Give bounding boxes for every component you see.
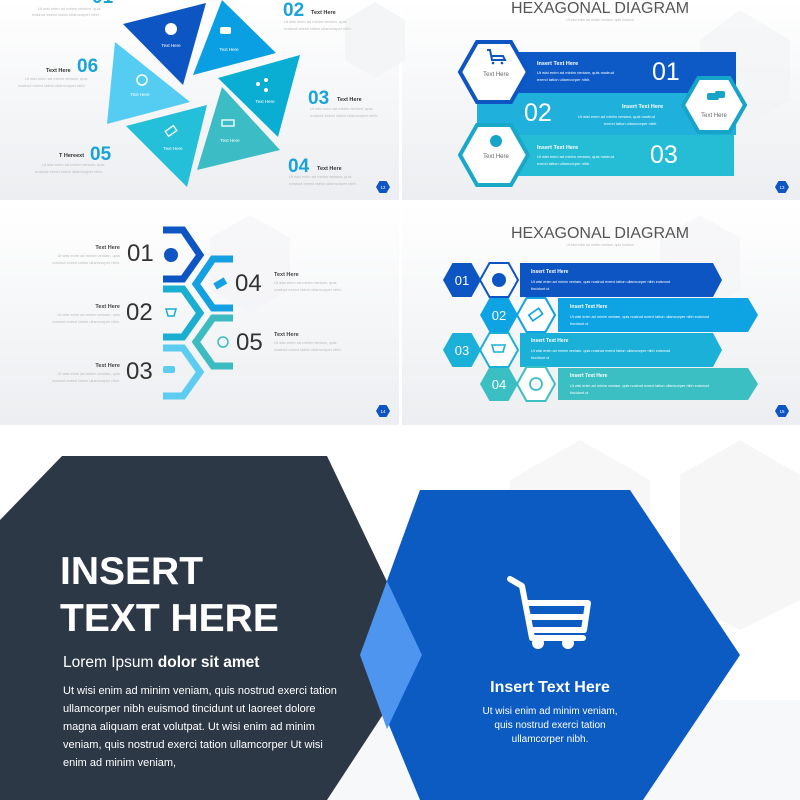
triangle 6 xyxy=(107,42,190,124)
triangle 2 xyxy=(193,0,276,75)
slide 12: triangle diagram xyxy=(18,0,390,193)
slide 13: hexagonal diagram bars: Ut wisi enim ad minim veniam, quis nostrud xyxy=(537,70,614,75)
slide 15: hexagon rows: Ut wisi enim ad minim veniam, quis nostrud exerci tation ullamcorper nibh euismod xyxy=(570,315,709,319)
slide 14: hex chevrons: Text Here xyxy=(274,272,299,278)
right heading and text: quis nostrud exerci tation xyxy=(494,720,606,731)
slide 13: hexagonal diagram bars: exerci tation ullamcorper nibh. xyxy=(604,121,657,126)
slide 12: triangle diagram: Text Here xyxy=(220,138,240,143)
triangle 5 xyxy=(126,105,207,187)
slide 14: hex chevrons: 05 xyxy=(236,329,263,356)
slide 12: triangle diagram: nostrud exerci tation ullamcorper nibh. xyxy=(284,26,352,31)
slide 13: hexagonal diagram bars: 03 xyxy=(650,141,678,169)
page badge 14: 14 xyxy=(380,409,386,414)
slide 12: triangle diagram: Text Here xyxy=(161,43,181,48)
title: HEXAGONAL DIAGRAM xyxy=(511,225,689,242)
slide 15: hexagon rows xyxy=(443,225,789,417)
slide 13: hexagonal diagram bars: 01 xyxy=(652,58,680,86)
labels: 06 xyxy=(77,56,98,77)
slide 14: hex chevrons: Text Here xyxy=(95,363,120,369)
slide 13: hexagonal diagram bars: Ut wisi enim ad minim veniam, quis nostrud xyxy=(537,154,614,159)
page badge 15: 15 xyxy=(779,409,785,414)
slide 14: hex chevrons: nostrud exerci tation ullamcorper nibh. xyxy=(52,319,120,324)
slide 14: hex chevrons: nostrud exerci tation ullamcorper nibh. xyxy=(52,260,120,265)
slide 12: triangle diagram: T Hereext xyxy=(59,153,84,159)
right heading and text xyxy=(482,679,618,745)
slide 14: hex chevrons: 04 xyxy=(235,270,262,297)
slide 13: hexagonal diagram bars: Insert Text Here xyxy=(622,104,663,110)
slide 12: triangle diagram: Text Here xyxy=(130,92,150,97)
slide 12: triangle diagram: nostrud exerci tation ullamcorper nibh. xyxy=(289,181,357,186)
slide 15: hexagon rows: tincidunt ut xyxy=(570,322,589,326)
slide 12: triangle diagram: Ut wisi enim ad minim veniam, quis xyxy=(25,76,87,81)
slide 15: hexagon rows: Insert Text Here xyxy=(531,338,569,344)
page badge 14 xyxy=(376,405,390,417)
slide 15: hexagon rows: tincidunt ut xyxy=(570,391,589,395)
slide 14: hex chevrons: nostrud exerci tation ullamcorper nibh. xyxy=(52,378,120,383)
subheading: Lorem Ipsum dolor sit amet xyxy=(63,654,259,671)
slide 15: hexagon rows: Ut wisi enim ad minim veniam, quis nostrud exerci tation ullamcorper nibh euismod xyxy=(570,384,709,388)
slide 13: hexagonal diagram bars xyxy=(460,0,789,193)
slide 15: hexagon rows: Insert Text Here xyxy=(531,269,569,275)
slide 12: triangle diagram: Text Here xyxy=(311,10,336,16)
slide 13: hexagonal diagram bars: 02 xyxy=(524,99,552,127)
slide 15: hexagon rows: Insert Text Here xyxy=(570,373,608,379)
paragraph: Ut wisi enim ad minim veniam, quis nostrud exerci tation xyxy=(63,685,337,697)
overlap diamond xyxy=(360,581,422,729)
slide 14: hex chevrons: Ut wisi enim ad minim veniam, quis xyxy=(274,280,336,285)
bottom slide xyxy=(0,456,800,800)
labels: 05 xyxy=(90,144,112,165)
blue hexagon xyxy=(360,490,740,800)
title: HEXAGONAL DIAGRAM xyxy=(511,0,689,17)
slide 14: hex chevrons: Ut wisi enim ad minim veniam, quis xyxy=(58,253,120,258)
slide 13: hexagonal diagram bars: Insert Text Here xyxy=(537,61,578,67)
slide 15: hexagon rows: Ut wisi enim ad minim veniam, quis nostrud xyxy=(566,243,634,247)
labels: 02 xyxy=(283,0,304,21)
page badge 13: 13 xyxy=(779,185,785,190)
slide 12: triangle diagram: Ut wisi enim ad minim veniam, quis xyxy=(289,174,351,179)
slide 14: hex chevrons xyxy=(52,230,390,417)
slide 15: hexagon rows: 04 xyxy=(492,377,506,392)
labels xyxy=(77,0,329,177)
labels: 04 xyxy=(288,156,310,177)
heading xyxy=(60,550,279,640)
heading: TEXT HERE xyxy=(60,597,279,640)
page badge 15 xyxy=(775,405,789,417)
slide 15: hexagon rows: 03 xyxy=(455,343,469,358)
slide 12: triangle diagram: Text Here xyxy=(163,146,183,151)
slide 14: hex chevrons: 02 xyxy=(126,299,153,326)
right heading and text: Ut wisi enim ad minim veniam, xyxy=(482,706,618,717)
heading: INSERT xyxy=(60,550,203,593)
slide backgrounds xyxy=(0,0,800,630)
slide 14: hex chevrons: nostrud exerci tation ullamcorper nibh. xyxy=(274,347,342,352)
slide 14: hex chevrons: Text Here xyxy=(274,332,299,338)
slide 12: triangle diagram: Text Here xyxy=(46,68,71,74)
triangle 4 xyxy=(197,87,280,170)
slide 14: hex chevrons: nostrud exerci tation ullamcorper nibh. xyxy=(274,287,342,292)
labels: 03 xyxy=(308,88,329,109)
right heading and text: Insert Text Here xyxy=(490,679,610,696)
slide 13: hexagonal diagram bars: Insert Text Here xyxy=(537,145,578,151)
page badge 13 xyxy=(775,181,789,193)
slide 14: hex chevrons: Ut wisi enim ad minim veniam, quis xyxy=(274,340,336,345)
slide 13: hexagonal diagram bars: Ut wisi enim ad minim veniam, quis nostrud xyxy=(566,18,634,22)
icon: cart xyxy=(510,579,588,638)
page badge 12: 12 xyxy=(380,185,386,190)
slide 15: hexagon rows: Ut wisi enim ad minim veniam, quis nostrud exerci tation ullamcorper nibh euismod xyxy=(531,349,670,353)
slide 15: hexagon rows: 01 xyxy=(455,273,469,288)
slide 12: triangle diagram: Ut wisi enim ad minim veniam, quis xyxy=(38,6,100,11)
slide 15: hexagon rows: tincidunt ut xyxy=(531,287,550,291)
slide 13: hexagonal diagram bars: Text Here xyxy=(483,72,509,78)
slide 12: triangle diagram: Text Here xyxy=(337,97,362,103)
slide 15: hexagon rows: tincidunt ut xyxy=(531,356,550,360)
slide 12: triangle diagram: Ut wisi enim ad minim veniam, quis xyxy=(310,106,372,111)
slide 12: triangle diagram: Ut wisi enim ad minim veniam, quis xyxy=(284,19,346,24)
page badge 12 xyxy=(376,181,390,193)
slide 14: hex chevrons: 03 xyxy=(126,358,153,385)
paragraph: ullamcorper nibh euismod tincidunt ut laoreet dolore xyxy=(63,703,316,715)
slide 15: hexagon rows: 02 xyxy=(492,308,506,323)
slide 13: hexagonal diagram bars: exerci tation ullamcorper nibh. xyxy=(537,77,590,82)
slide 14: hex chevrons: Ut wisi enim ad minim veniam, quis xyxy=(58,312,120,317)
triangle 1 xyxy=(123,3,206,85)
slide 14: hex chevrons: Text Here xyxy=(95,304,120,310)
number hexes xyxy=(443,263,481,297)
right heading and text: ullamcorper nibh. xyxy=(512,734,588,745)
slide 15: hexagon rows: Insert Text Here xyxy=(570,304,608,310)
slide 12: triangle diagram: Ut wisi enim ad minim veniam, quis xyxy=(42,162,104,167)
slide 12: triangle diagram: nostrud exerci tation ullamcorper nibh. xyxy=(32,12,100,17)
slide 13: hexagonal diagram bars: Ut wisi enim ad minim veniam, quis nostrud xyxy=(578,114,655,119)
hexagons xyxy=(460,42,528,102)
slide 12: triangle diagram: nostrud exerci tation ullamcorper nibh. xyxy=(310,113,378,118)
paragraph: veniam, quis nostrud exerci tation ullamcorper Ut wisi xyxy=(63,739,323,751)
slide 12: triangle diagram: nostrud exerci tation ullamcorper nibh. xyxy=(35,169,103,174)
bars xyxy=(477,52,736,93)
slide 15: hexagon rows: Ut wisi enim ad minim veniam, quis nostrud exerci tation ullamcorper nibh euismod xyxy=(531,280,670,284)
slide 12: triangle diagram: Text Here xyxy=(219,47,239,52)
slide 14: hex chevrons: Text Here xyxy=(95,245,120,251)
slide 13: hexagonal diagram bars: exerci tation ullamcorper nibh. xyxy=(537,161,590,166)
bars xyxy=(520,263,722,297)
paragraph: enim ad minim veniam, xyxy=(63,757,176,769)
slide 13: hexagonal diagram bars: Text Here xyxy=(701,113,727,119)
slide 14: hex chevrons: 01 xyxy=(127,240,154,267)
paragraph: magna aliquam erat volutpat. Ut wisi enim ad minim xyxy=(63,721,315,733)
paragraph xyxy=(63,685,337,769)
dark hexagon xyxy=(0,456,422,800)
slide 14: hex chevrons: Ut wisi enim ad minim veniam, quis xyxy=(58,371,120,376)
slide 12: triangle diagram: Text Here xyxy=(317,166,342,172)
slide 12: triangle diagram: Text Here xyxy=(255,99,275,104)
triangle 3 xyxy=(218,55,300,137)
slide 13: hexagonal diagram bars: Text Here xyxy=(483,154,509,160)
icon hexes xyxy=(480,263,518,297)
slide 12: triangle diagram: nostrud exerci tation ullamcorper nibh. xyxy=(18,83,86,88)
